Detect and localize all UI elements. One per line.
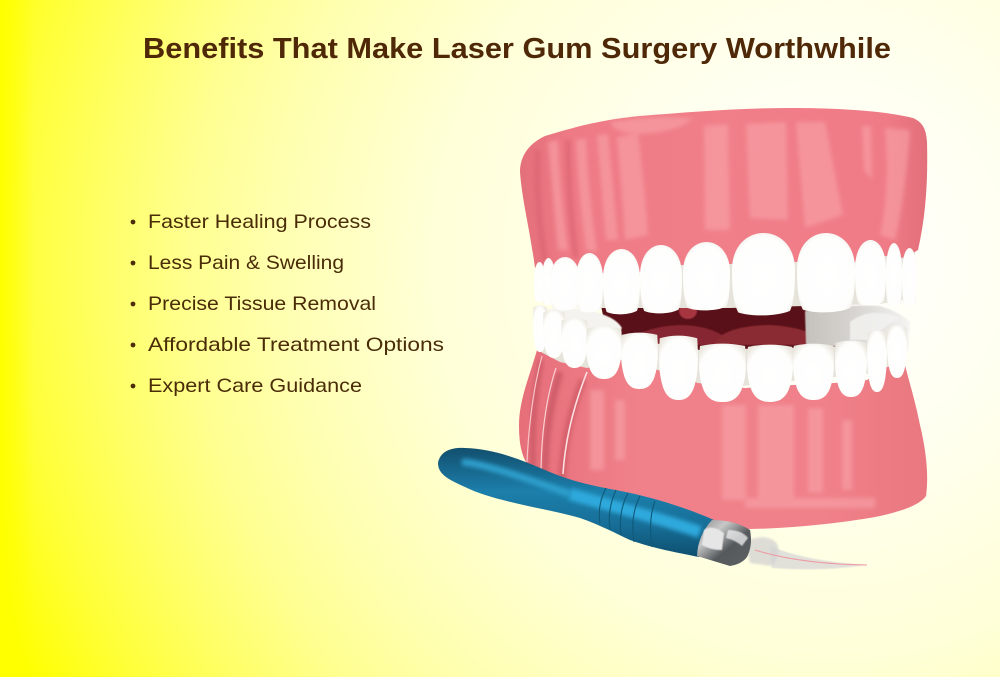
benefits bullet list bbox=[131, 211, 444, 397]
title: Benefits That Make Laser Gum Surgery Worthwhile bbox=[143, 33, 891, 65]
grip rings bbox=[599, 488, 655, 547]
lower tooth base filling gaps between teeth bbox=[535, 315, 905, 390]
bullet: expert care: Expert Care Guidance bbox=[148, 375, 362, 397]
upper teeth bbox=[534, 233, 917, 315]
upper gum bbox=[520, 108, 927, 273]
laser tip bbox=[745, 537, 867, 569]
chrome collar bbox=[697, 520, 751, 566]
bullet: less pain: Less Pain & Swelling bbox=[148, 252, 344, 274]
laser handpiece bbox=[438, 448, 867, 569]
upper tooth base filling gaps between teeth bbox=[537, 250, 915, 308]
handpiece body bbox=[438, 448, 714, 557]
bullet: precise removal: Precise Tissue Removal bbox=[148, 293, 376, 315]
lower gum lobes on left bbox=[527, 356, 587, 484]
bullet: faster healing: Faster Healing Process bbox=[148, 211, 371, 233]
lower back teeth bbox=[533, 306, 910, 352]
lower teeth bbox=[533, 305, 907, 402]
dental model illustration bbox=[438, 108, 927, 569]
lower gum highlights bbox=[590, 390, 875, 508]
bullet: affordable options: Affordable Treatment Options bbox=[148, 334, 444, 356]
handpiece highlight bbox=[462, 462, 700, 532]
upper gum shadow stripes bbox=[537, 140, 576, 262]
mouth interior bbox=[600, 300, 850, 352]
upper gum highlights bbox=[548, 117, 910, 252]
lower gum bbox=[519, 350, 927, 529]
